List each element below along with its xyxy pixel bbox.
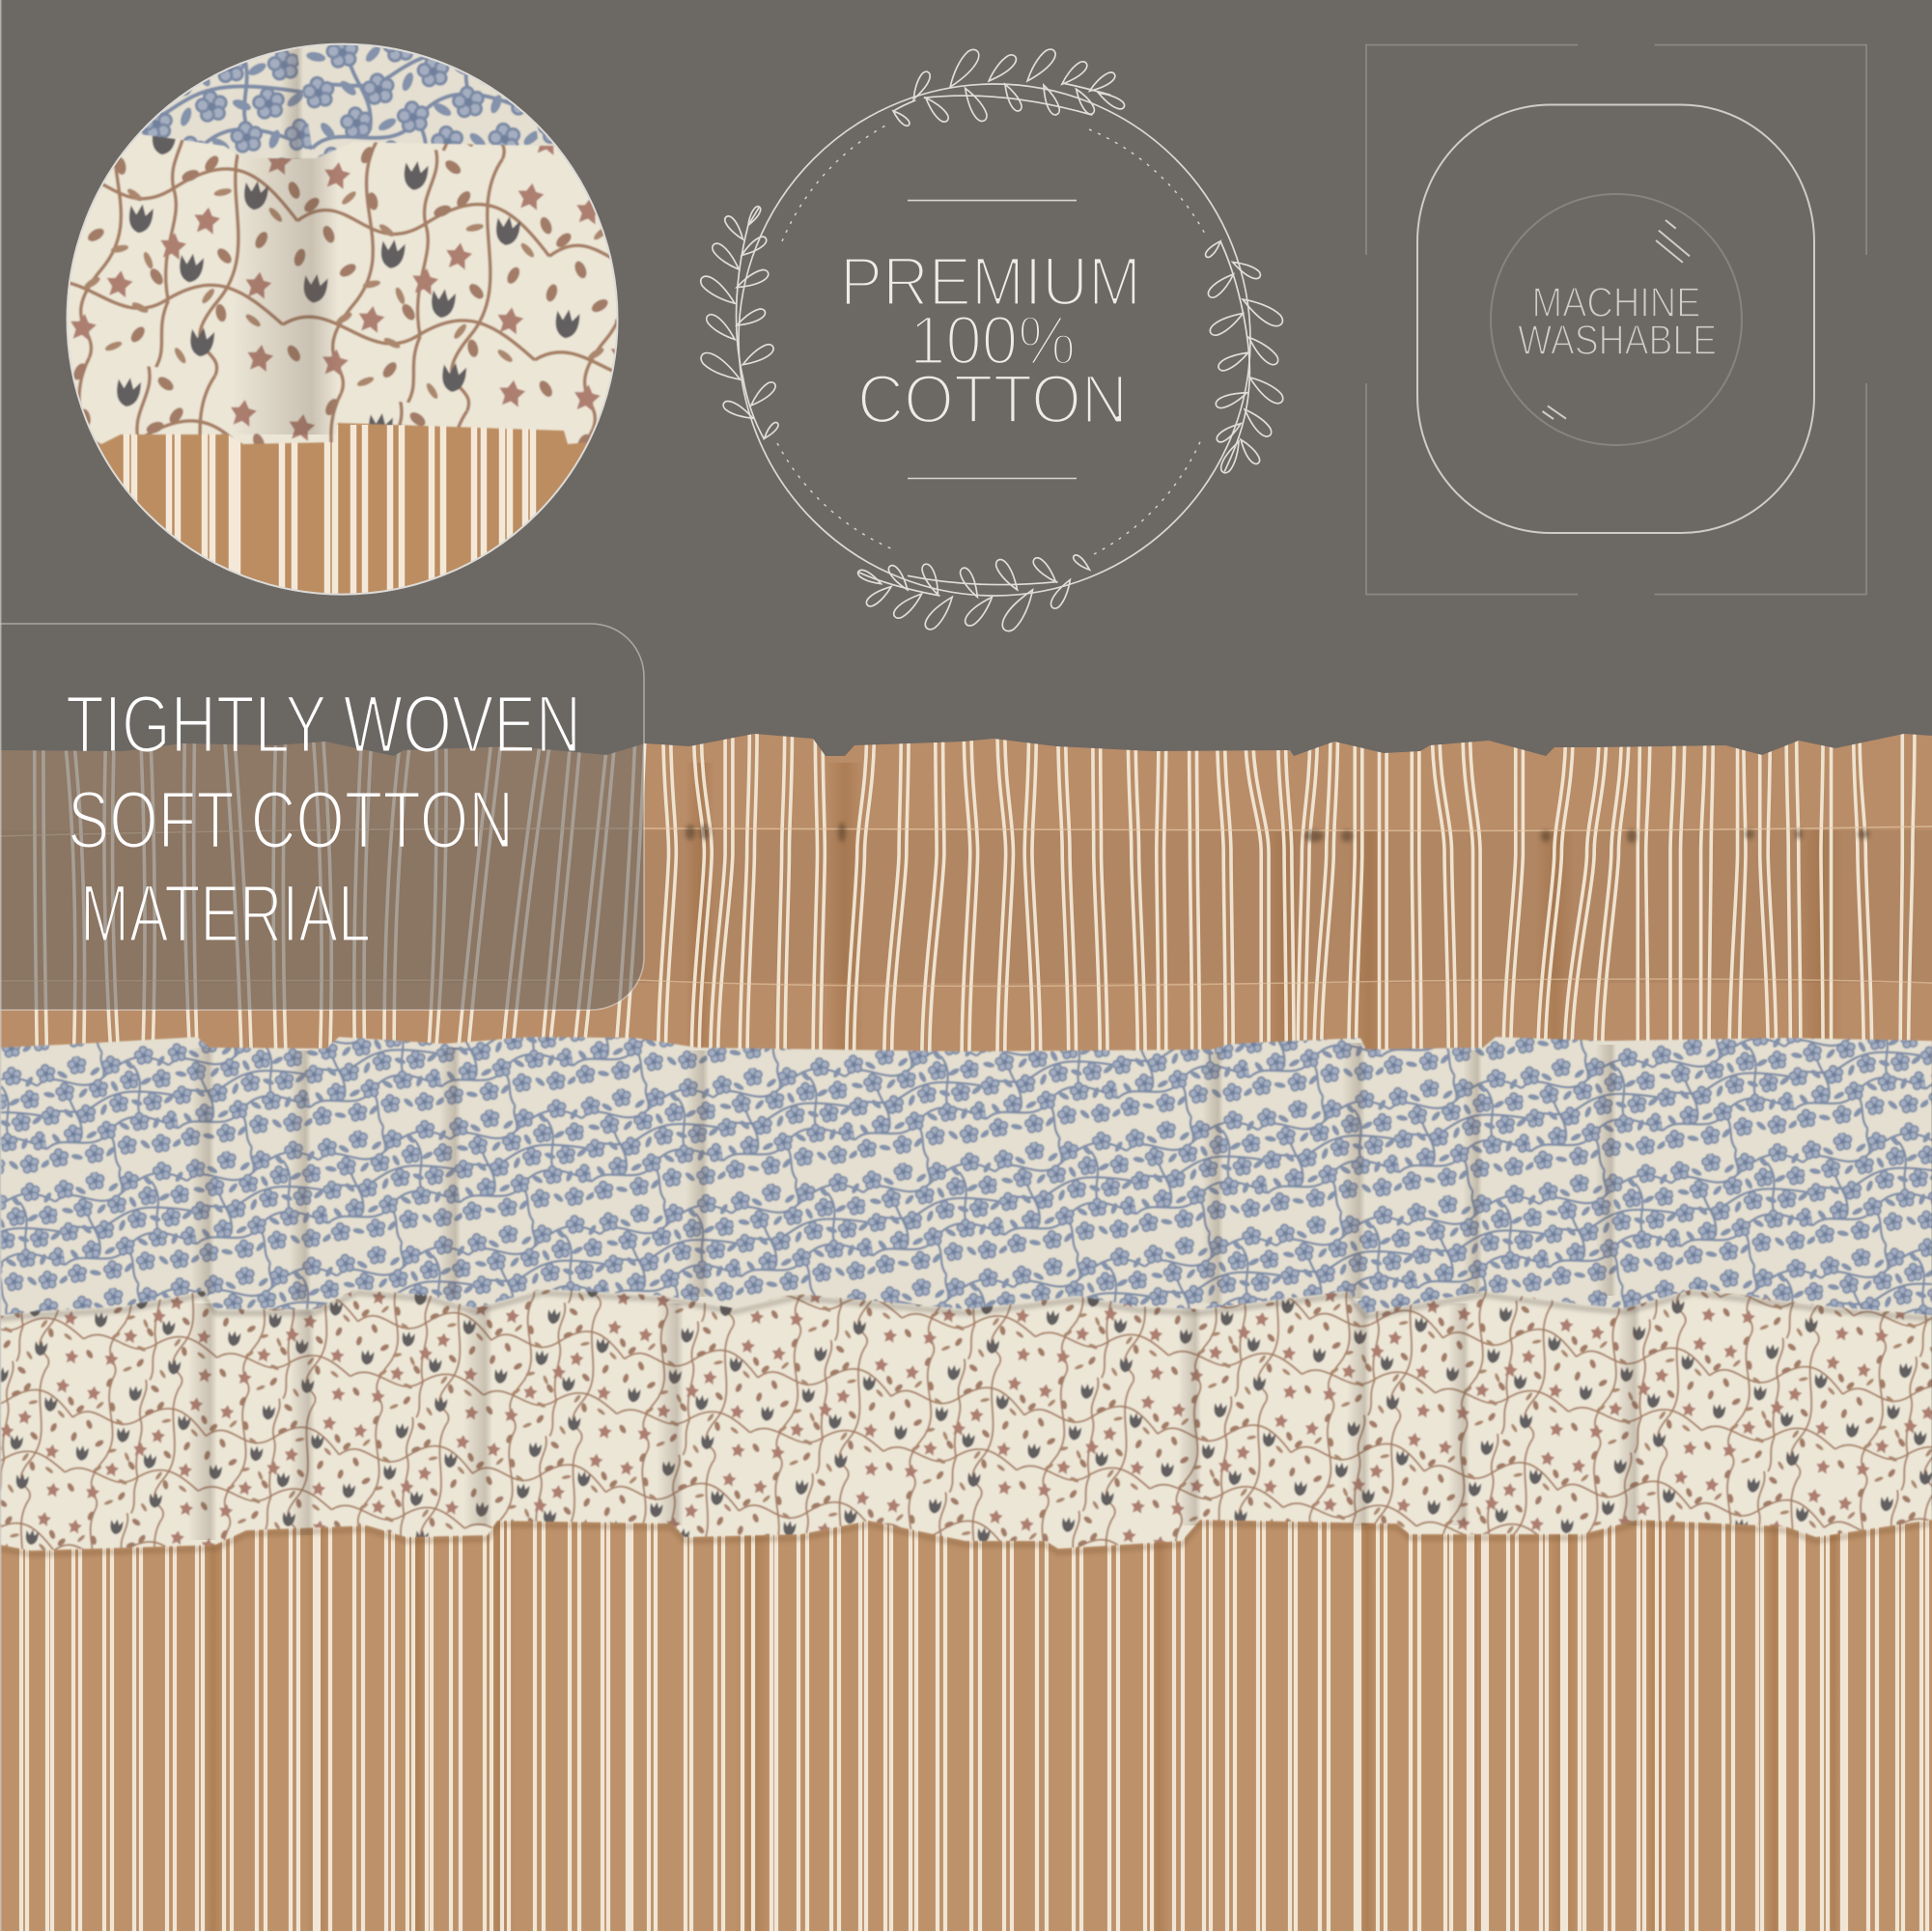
ruffle shadow on stripes — [0, 1524, 1932, 1554]
branch stems — [737, 83, 1249, 596]
machine washable text: WASHABLE — [1518, 317, 1717, 364]
inner circle — [1491, 194, 1742, 445]
badge: premium 100% cotton wreath — [698, 46, 1286, 634]
machine washable text — [1518, 279, 1717, 364]
glint marks — [1543, 220, 1690, 419]
callout text: TIGHTLY WOVEN — [66, 679, 581, 770]
badge divider lines — [908, 201, 1077, 479]
callout text: MATERIAL — [80, 868, 371, 959]
blue floral ruffle — [0, 1037, 1932, 1319]
lower striped panel — [0, 1506, 1932, 1931]
badge text: PREMIUM — [840, 244, 1141, 321]
callout text: SOFT COTTON — [68, 774, 514, 865]
badge text — [840, 244, 1141, 438]
upper striped rod pocket and header — [0, 724, 1932, 1081]
top leaves — [891, 46, 1126, 127]
close-up striped fabric — [98, 422, 587, 594]
translucent callout box — [0, 624, 644, 1010]
image edge highlight — [0, 0, 2, 1931]
badge text: 100% — [910, 303, 1076, 379]
badge: machine washable — [1366, 44, 1866, 595]
machine washable text: MACHINE — [1531, 279, 1701, 326]
close-up brown floral — [58, 126, 628, 454]
panel: tightly woven callout — [0, 624, 644, 1010]
right leaves — [1204, 238, 1286, 475]
brown floral ruffle — [0, 1274, 1932, 1551]
photo: curtain with ticking stripes and floral ruffles — [0, 724, 1932, 1931]
rounded square — [1417, 104, 1814, 533]
callout text — [68, 697, 575, 940]
detail circle border — [68, 44, 618, 595]
close-up blue floral — [141, 44, 554, 159]
outer corner brackets — [1366, 44, 1866, 595]
badge text: COTTON — [857, 362, 1128, 438]
bottom leaves — [856, 553, 1092, 634]
dotted inner arcs — [777, 125, 1206, 554]
wreath circle — [739, 84, 1250, 596]
wreath branches — [698, 46, 1286, 634]
left leaves — [698, 205, 780, 440]
detail circle: fabric close-up — [58, 39, 637, 608]
